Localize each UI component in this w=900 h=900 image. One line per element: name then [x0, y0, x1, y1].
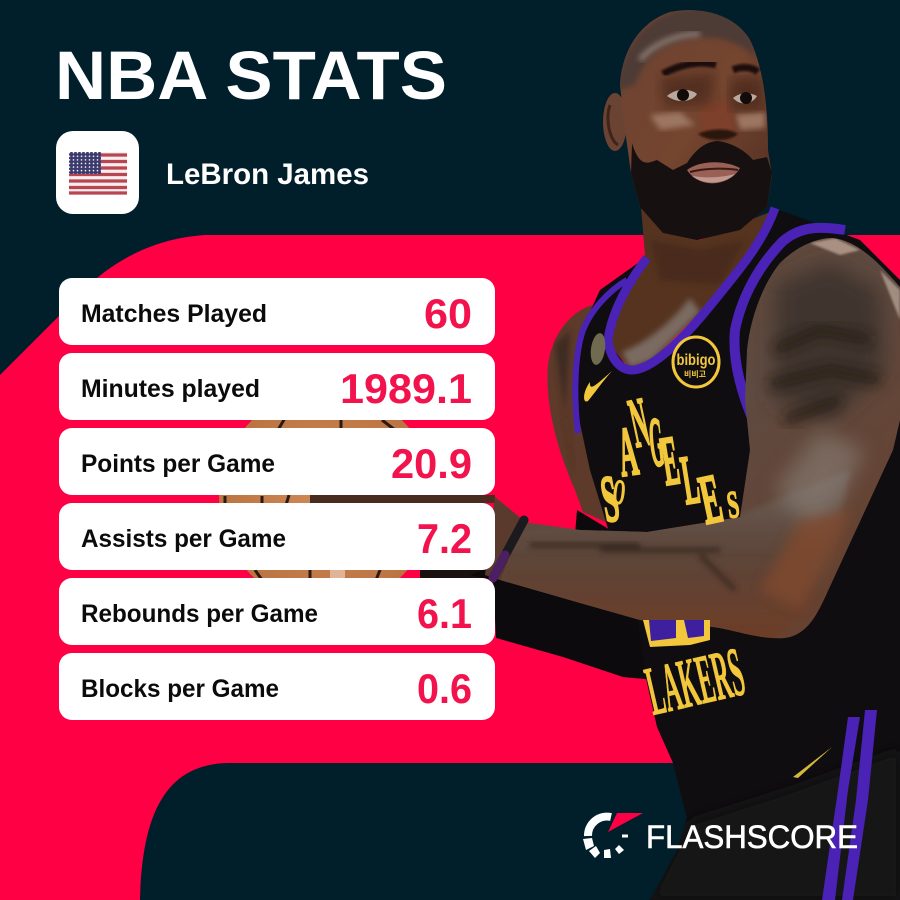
sponsor badge: 비비고: [684, 369, 707, 380]
stat row: assists per game: 7.2: [417, 515, 472, 562]
jersey number fragment: [643, 620, 710, 647]
stat row: matches played: [59, 278, 495, 345]
beard and mustache: [631, 141, 772, 240]
stat row: minutes played: 1989.1: [340, 365, 472, 412]
jersey and shorts: [575, 210, 900, 900]
stat row: points per game: [59, 428, 495, 495]
flag tile: [56, 131, 139, 214]
jersey text: Los Angeles: S: [596, 463, 624, 537]
stat row: minutes played: Minutes played: [81, 375, 260, 403]
sponsor badge: [673, 337, 719, 387]
jersey text: Los Angeles: [596, 384, 742, 539]
compression sleeve on far arm: [470, 510, 660, 680]
icon: speedometer: [583, 813, 643, 858]
stat row: rebounds per game: [59, 578, 495, 645]
cheek and nose highlights: [650, 112, 695, 130]
jersey text: Los Angeles: G: [646, 405, 667, 482]
jersey text: Los Angeles: E: [656, 422, 684, 501]
nike swoosh: [584, 371, 612, 401]
eyes: [667, 90, 697, 101]
shorts shading: [660, 758, 896, 896]
player: LeBron James: [470, 8, 900, 900]
ear: [603, 93, 627, 151]
jersey badge: [589, 332, 607, 366]
stat row: assists per game: [59, 503, 495, 570]
stat row: minutes played: [59, 353, 495, 420]
stat row: blocks per game: 0.6: [417, 665, 472, 712]
jersey text: Los Angeles: E: [693, 459, 728, 539]
player name: LeBron James: [166, 158, 369, 191]
nose shadow: [698, 130, 738, 140]
Flashscore logo: [583, 813, 858, 858]
head: [603, 8, 772, 240]
stat row: matches played: 60: [424, 290, 472, 337]
hand: [485, 497, 523, 580]
armhole trim left: [575, 280, 627, 433]
stat row: rebounds per game: Rebounds per Game: [81, 600, 318, 628]
stat row: blocks per game: [59, 653, 495, 720]
armhole trim right: [734, 228, 845, 425]
jersey text: Los Angeles: S: [724, 482, 742, 527]
jersey text: Los Angeles: A: [613, 413, 642, 492]
shaved hairline: [618, 8, 758, 90]
stat row: assists per game: Assists per Game: [81, 525, 286, 553]
title: NBA STATS: [55, 37, 447, 114]
stat row: rebounds per game: 6.1: [417, 590, 472, 637]
neck and chest: [610, 195, 775, 368]
jersey text: Los Angeles: N: [623, 384, 655, 463]
right upper arm and forearm: [500, 238, 900, 640]
basketball: [219, 390, 495, 606]
shorts stripes: [822, 710, 877, 900]
far arm: [547, 305, 622, 522]
sponsor badge: bibigo: [676, 352, 716, 369]
stat row: matches played: Matches Played: [81, 300, 267, 328]
mouth: [687, 162, 740, 183]
jersey text: Los Angeles: L: [676, 441, 704, 520]
skull and face: [620, 10, 772, 240]
stat row: points per game: Points per Game: [81, 450, 275, 478]
stat row: points per game: 20.9: [391, 440, 472, 487]
jersey text: Los Angeles: O: [611, 472, 627, 512]
icon: US flag: [69, 152, 127, 194]
wordmark: FLASHSCORE: [646, 819, 858, 855]
stat row: blocks per game: Blocks per Game: [81, 675, 279, 703]
shorts logo: [793, 747, 832, 778]
red curved panel: [0, 235, 900, 900]
wristband: [493, 520, 524, 578]
brows: [663, 63, 758, 74]
collar trim: [608, 208, 775, 370]
